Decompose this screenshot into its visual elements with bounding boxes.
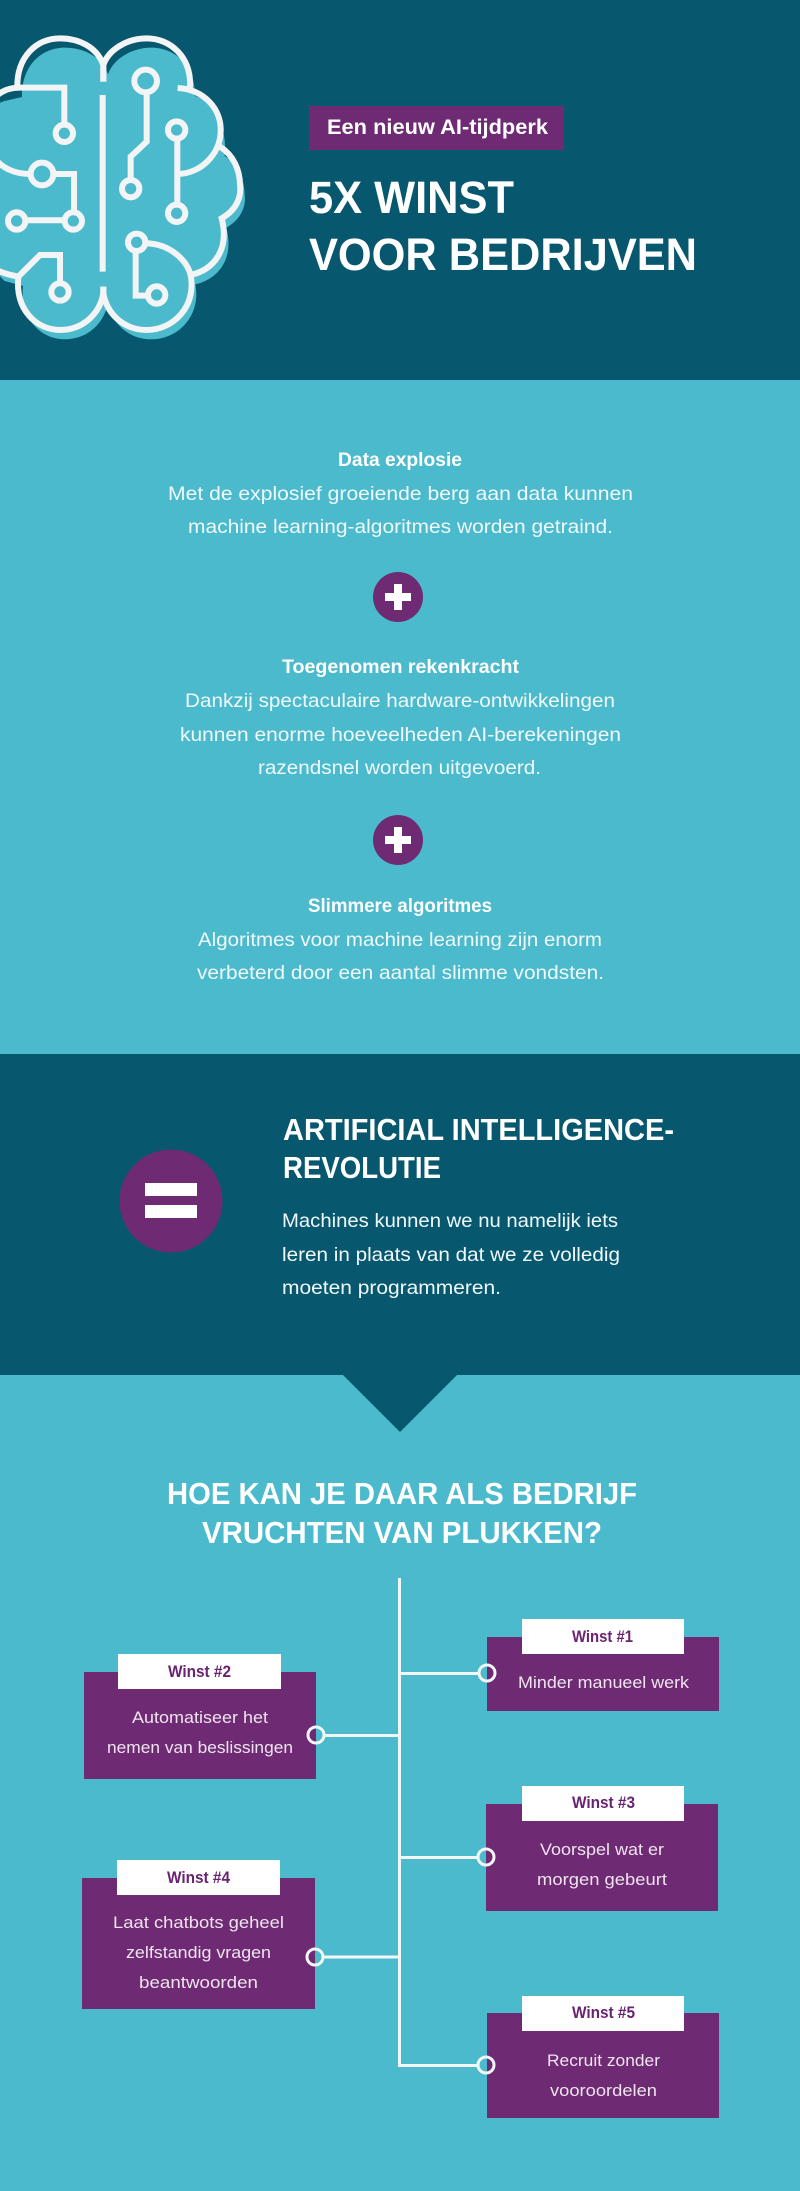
card: Winst #3 [478,1786,718,1911]
text block: Data explosie: machine learning-algoritmes worden getraind. [188,516,613,538]
text block: Slimmere algoritmes: Slimmere algoritmes [308,896,492,917]
text block: revolution description: leren in plaats van dat we ze volledig [282,1244,620,1266]
card: Winst #5: Recruit zonder [547,2052,661,2070]
text block: Toegenomen rekenkracht [180,657,621,779]
text block: Data explosie [168,450,633,538]
icon: equals [120,1150,222,1252]
heading: Hoe kan je daar als bedrijf vruchten van plukken [167,1476,637,1550]
icon: plus [373,815,423,865]
card: Winst #4: zelfstandig vragen [126,1944,271,1962]
text block: Toegenomen rekenkracht: Dankzij spectaculaire hardware-ontwikkelingen [185,690,615,712]
connector tree [323,1578,479,2066]
text block: Data explosie: Data explosie [338,450,462,471]
heading: Artificial intelligence-revolutie: ARTIFICIAL INTELLIGENCE- [283,1112,674,1147]
tag: Een nieuw AI-tijdperk [309,106,564,150]
card: Winst #2: nemen van beslissingen [107,1739,293,1757]
tag: Een nieuw AI-tijdperk: Een nieuw AI-tijdperk [327,116,548,139]
panel: ingredients [0,380,800,1054]
card: Winst #5: Winst #5 [572,2004,635,2022]
card: Winst #2: Winst #2 [168,1663,231,1681]
card: Winst #3: Winst #3 [572,1794,635,1812]
panel: header [0,0,800,380]
text block: revolution description: moeten programmeren. [282,1277,501,1299]
title: 5X WINST [309,172,514,223]
heading: Hoe kan je daar als bedrijf vruchten van plukken: HOE KAN JE DAAR ALS BEDRIJF [167,1476,637,1511]
heading: Artificial intelligence-revolutie [283,1112,674,1185]
card: Winst #1: Winst #1 [572,1628,633,1646]
card: Winst #4: beantwoorden [139,1974,258,1992]
heading: Hoe kan je daar als bedrijf vruchten van plukken: VRUCHTEN VAN PLUKKEN? [202,1515,602,1550]
card: Winst #1: Minder manueel werk [518,1674,690,1692]
text block: revolution description [282,1210,620,1299]
panel: benefits [0,1375,800,2191]
text block: Slimmere algoritmes [197,896,604,984]
title [309,172,697,280]
text block: Slimmere algoritmes: Algoritmes voor machine learning zijn enorm [198,929,602,951]
icon: plus [373,572,423,622]
text block: Slimmere algoritmes: verbeterd door een aantal slimme vondsten. [197,962,604,984]
heading: Artificial intelligence-revolutie: REVOLUTIE [283,1150,441,1185]
text block: revolution description: Machines kunnen we nu namelijk iets [282,1210,618,1232]
card: Winst #2 [84,1654,324,1779]
text block: Toegenomen rekenkracht: Toegenomen rekenkracht [282,657,520,678]
text block: Toegenomen rekenkracht: kunnen enorme hoeveelheden AI-berekeningen [180,724,621,746]
arrow: pointer from revolution panel [343,1375,457,1432]
panel: AI revolution [0,1054,800,1375]
card: Winst #4: Winst #4 [167,1869,231,1887]
icon: brain with circuit lines [0,38,245,339]
title: VOOR BEDRIJVEN [309,229,697,280]
card: Winst #4: Laat chatbots geheel [113,1914,284,1932]
card: Winst #5: vooroordelen [550,2082,657,2100]
card: Winst #3: Voorspel wat er [540,1841,665,1859]
card: Winst #4 [82,1860,323,2009]
text block: Toegenomen rekenkracht: razendsnel worden uitgevoerd. [258,757,541,779]
text block: Data explosie: Met de explosief groeiende berg aan data kunnen [168,483,633,505]
card: Winst #2: Automatiseer het [132,1709,268,1727]
card: Winst #1 [479,1619,719,1711]
card: Winst #3: morgen gebeurt [537,1871,667,1889]
card: Winst #5 [478,1996,719,2118]
